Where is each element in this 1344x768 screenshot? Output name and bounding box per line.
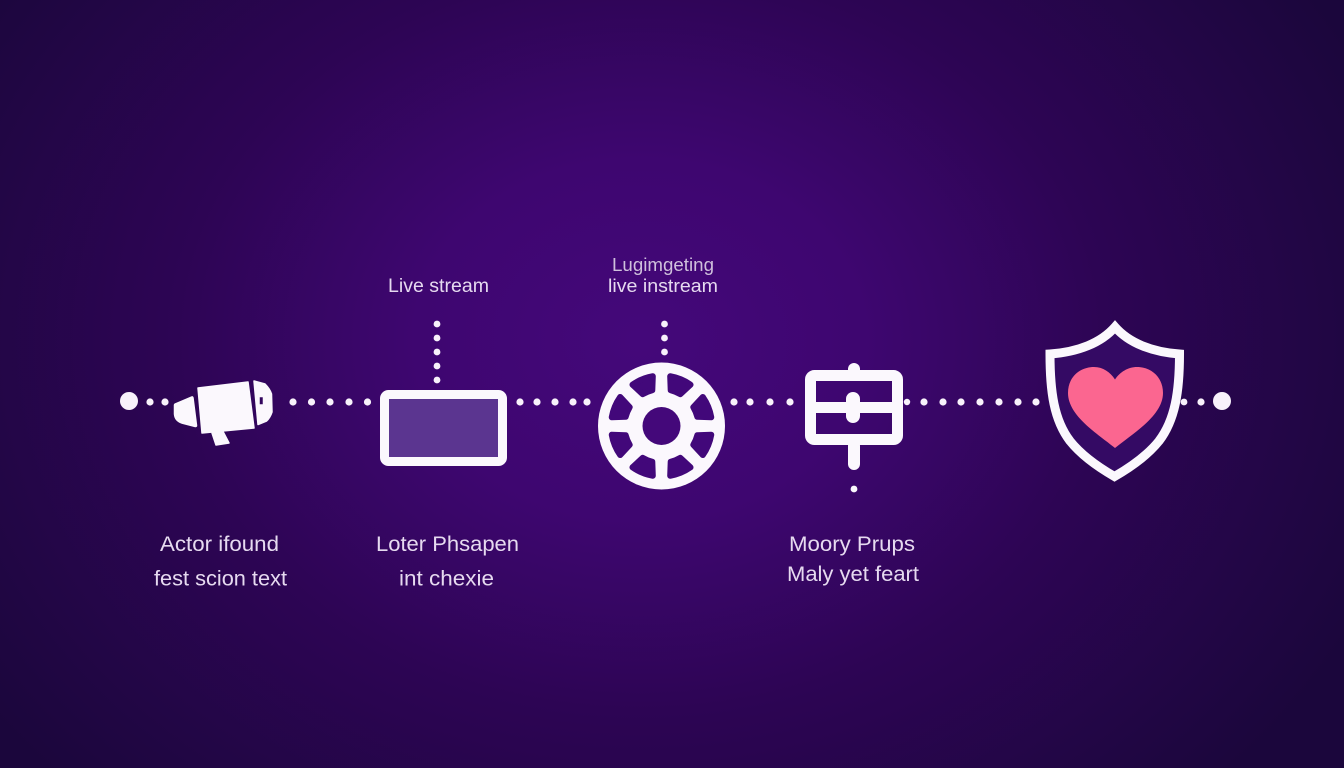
label: loter phsapen: Loter Phsapen — [376, 533, 519, 556]
label: actor found — [154, 533, 287, 590]
icon: camera — [176, 381, 272, 445]
icon: film reel — [598, 362, 725, 490]
heart — [1068, 367, 1163, 448]
label: actor found: fest scion text — [154, 568, 287, 590]
dotted timeline — [120, 392, 1231, 410]
label: loter phsapen — [376, 533, 519, 590]
icon: screen — [384, 394, 502, 462]
label: loter phsapen: int chexie — [399, 568, 494, 590]
label: live instream: Lugimgeting — [612, 255, 714, 275]
label: moory prups — [787, 533, 919, 586]
label: actor found: Actor ifound — [160, 533, 279, 556]
label: moory prups: Maly yet feart — [787, 563, 919, 586]
label: live instream: live instream — [608, 275, 718, 296]
label: moory prups: Moory Prups — [789, 533, 915, 556]
icon: shield with heart — [1050, 327, 1180, 476]
label: live instream — [608, 255, 718, 296]
vertical dotted connector: live instream — [661, 321, 668, 355]
icon: signpost — [810, 363, 898, 492]
label: live stream: Live stream — [388, 276, 489, 297]
vertical dotted connector: live stream — [434, 321, 440, 383]
